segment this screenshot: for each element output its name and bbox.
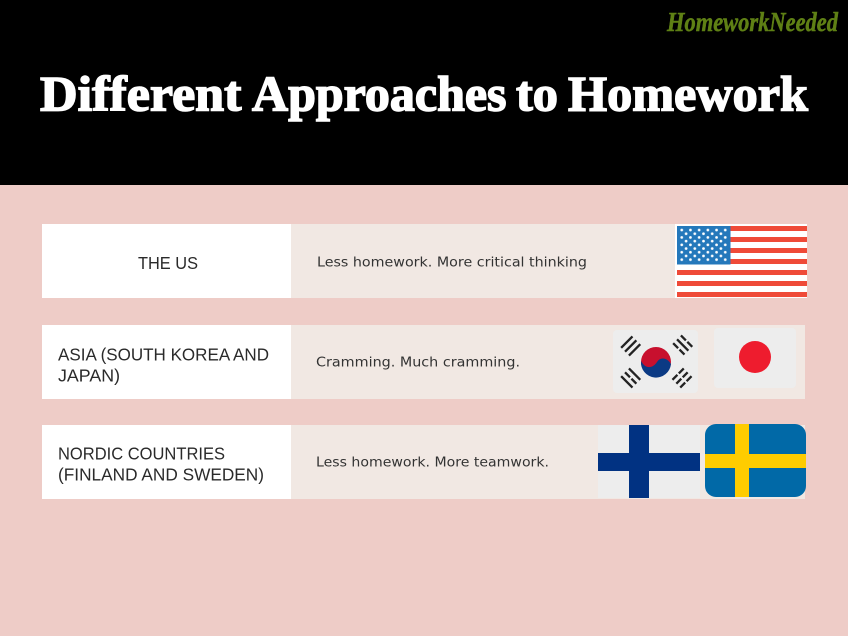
label cell: Nordic <box>42 425 291 499</box>
description: Nordic: Less homework. More teamwork. <box>316 454 549 470</box>
header band <box>0 0 848 185</box>
icon: Japan flag <box>714 328 796 388</box>
icon: Sweden flag <box>705 424 806 497</box>
panel: Asia row <box>42 325 805 399</box>
label: Asia: JAPAN) <box>58 366 120 386</box>
title: Approaches <box>252 66 506 122</box>
label cell: Asia <box>42 325 291 399</box>
title: Homework <box>568 66 808 122</box>
label: Nordic: (FINLAND AND SWEDEN) <box>58 465 264 485</box>
description cell: the US <box>291 224 805 298</box>
description: Asia: Cramming. Much cramming. <box>316 354 520 370</box>
title: Different <box>40 66 242 122</box>
label cell: the US <box>42 224 291 298</box>
label: Nordic: NORDIC COUNTRIES <box>58 444 225 464</box>
icon: US flag <box>675 224 807 298</box>
label: Asia: ASIA (SOUTH KOREA AND <box>58 345 269 365</box>
panel: the US row <box>42 224 807 298</box>
description cell: Asia <box>291 325 805 399</box>
icon: Finland flag <box>598 425 700 498</box>
title: to <box>516 66 558 122</box>
panel: Nordic row <box>42 424 806 499</box>
icon: South Korea flag <box>613 330 698 393</box>
description: the US: Less homework. More critical thinking <box>317 254 587 270</box>
description cell: Nordic <box>291 425 805 499</box>
label: the US: THE US <box>138 253 198 273</box>
